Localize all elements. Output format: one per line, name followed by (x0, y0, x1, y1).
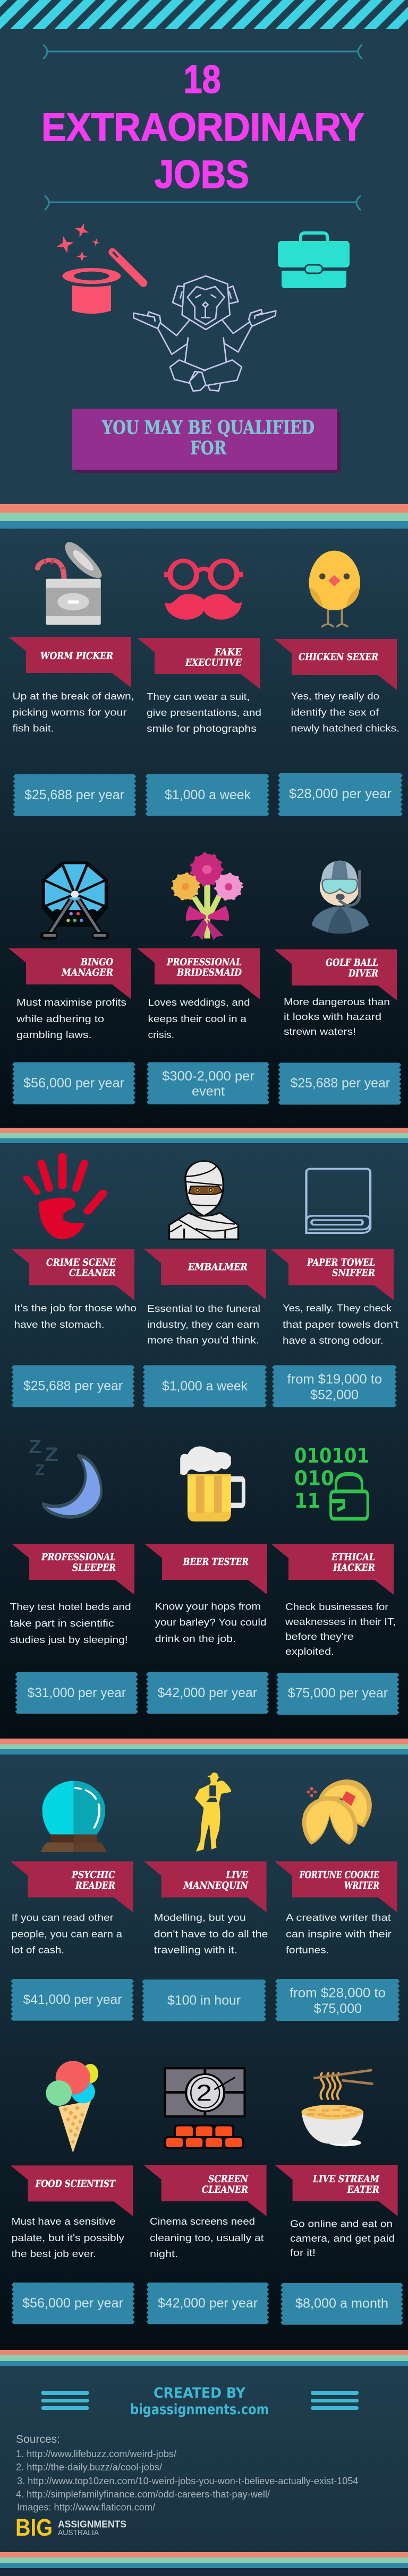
icon: crystal ball (41, 1781, 107, 1852)
description: give presentations, and (147, 707, 261, 718)
icon: ice cream (46, 2061, 98, 2153)
subtitle box: FOR (190, 437, 227, 459)
ribbon: food scientist: FOOD SCIENTIST (35, 2178, 116, 2190)
description: More dangerous than (284, 997, 390, 1007)
ribbon: fake executive: FAKE (214, 646, 242, 658)
salary: $1,000 a week (165, 788, 251, 802)
description: your barley? You could (155, 1617, 267, 1628)
description (285, 1602, 396, 1657)
description (286, 1913, 392, 1956)
colour band 3 (0, 1739, 408, 1754)
icon: moon and zzz: Z (35, 1462, 45, 1479)
card: ethical hacker (271, 1444, 400, 1715)
description: drink on the job. (155, 1633, 236, 1644)
icon: magic hat and wand (54, 221, 143, 314)
description (13, 691, 134, 734)
description: Loves weddings, and (148, 997, 250, 1008)
card: chicken sexer (274, 551, 403, 816)
ribbon: crime scene cleaner: CLEANER (69, 1267, 116, 1279)
salary: $300-2,000 per (162, 1069, 254, 1084)
colour band 2 (0, 1128, 408, 1143)
card: live mannequin (142, 1773, 268, 2021)
ribbon: live stream eater: EATER (347, 2184, 379, 2195)
colour band 1 (0, 504, 408, 529)
card: worm picker (8, 542, 136, 816)
footer: created by (41, 2385, 359, 2418)
sources: 4. http://simplefamilyfinance.com/odd-careers-that-pay-well/ (16, 2489, 270, 2500)
description: Up at the break of dawn, (13, 691, 134, 702)
description: palate, but it's possibly (12, 2233, 124, 2243)
salary: $75,000 per year (288, 1685, 388, 1700)
created by heading: bigassignments.com (130, 2401, 269, 2418)
ribbon: fortune cookie writer: WRITER (344, 1880, 379, 1891)
icon: diver (312, 861, 369, 933)
card: professional bridesmaid (137, 854, 269, 1104)
description (148, 997, 250, 1040)
icon: noodle bowl (301, 2070, 373, 2146)
card: bingo manager (8, 861, 135, 1104)
logo: ASSIGNMENTS (58, 2519, 126, 2530)
salary: from $19,000 to (287, 1372, 382, 1387)
icon: mannequin silhouette (195, 1773, 231, 1852)
salary (276, 1673, 400, 1715)
ribbon: ethical hacker (271, 1544, 394, 1595)
icon: right bars (311, 2391, 359, 2410)
description: travelling with it. (154, 1945, 237, 1956)
ribbon: paper towel sniffer: SNIFFER (332, 1267, 375, 1279)
salary: $25,688 per year (24, 788, 124, 802)
description: Essential to the funeral (147, 1303, 260, 1314)
ribbon: crime scene cleaner (12, 1249, 134, 1300)
icon: cinema screen and seats (164, 2067, 245, 2149)
icon: left bars (41, 2391, 89, 2410)
description: A creative writer that (286, 1913, 391, 1923)
description: crisis. (148, 1030, 174, 1040)
card: screen cleaner (144, 2067, 269, 2324)
description (150, 2216, 264, 2259)
subtitle box: YOU MAY BE QUALIFIED (101, 417, 314, 439)
salary (13, 774, 136, 816)
description (10, 1602, 131, 1645)
description (12, 1913, 123, 1956)
ribbon: professional bridesmaid (137, 948, 260, 999)
description: people, you can earn a (12, 1929, 123, 1939)
card: live stream eater (275, 2070, 403, 2325)
description (147, 691, 261, 734)
title: 18 (184, 57, 221, 101)
icon: chick (309, 551, 360, 627)
title: EXTRAORDINARY (41, 105, 364, 149)
ribbon: professional bridesmaid: BRIDESMAID (176, 967, 242, 979)
description: before they're (285, 1631, 354, 1642)
icon: bouquet (173, 854, 241, 940)
salary: $8,000 a month (295, 2296, 388, 2311)
card: fake executive (137, 561, 269, 816)
description: exploited. (285, 1646, 334, 1657)
card: professional sleeper (10, 1436, 138, 1714)
description: If you can read other (12, 1913, 114, 1923)
description (155, 1601, 267, 1644)
ribbon: embalmer: EMBALMER (188, 1261, 248, 1273)
description: gambling laws. (16, 1030, 91, 1040)
description (147, 1303, 260, 1346)
salary (11, 1979, 134, 2021)
icon: moon and zzz: Z (29, 1436, 41, 1457)
icon: glasses and moustache (164, 561, 243, 620)
description: it looks with hazard (284, 1012, 381, 1022)
salary (146, 1672, 269, 1714)
ribbon: embalmer (143, 1249, 266, 1300)
ribbon: live stream eater: LIVE STREAM (312, 2173, 380, 2185)
icon: binary and padlock: 010101 (294, 1444, 369, 1467)
icon: meditating monkey (134, 276, 276, 391)
card: beer tester (144, 1446, 269, 1714)
sources: Sources: (16, 2433, 60, 2445)
description: Yes, they really do (291, 691, 379, 702)
description: strewn waters! (284, 1026, 356, 1037)
description: They can wear a suit, (147, 691, 250, 702)
ribbon: fortune cookie writer: FORTUNE COOKIE (299, 1869, 379, 1881)
icon: beer mug (180, 1446, 243, 1522)
ribbon: professional sleeper: SLEEPER (72, 1562, 116, 1574)
ribbon: beer tester (144, 1544, 267, 1595)
description (154, 1913, 268, 1956)
salary: $31,000 per year (28, 1685, 126, 1700)
ribbon: bingo manager (8, 948, 131, 999)
sources: 2. http://the-daily.buzz/a/cool-jobs/ (16, 2462, 162, 2473)
description: lot of cash. (12, 1945, 64, 1956)
card: psychic reader (11, 1781, 134, 2021)
ribbon: screen cleaner: CLEANER (202, 2184, 248, 2195)
salary: $42,000 per year (158, 2296, 258, 2311)
description: that paper towels don't (283, 1319, 398, 1330)
salary: $25,688 per year (290, 1076, 390, 1091)
description: smile for photographs (147, 723, 257, 734)
description: studies just by sleeping! (10, 1635, 128, 1645)
ribbon: food scientist (11, 2165, 133, 2216)
ribbon: professional sleeper (12, 1544, 134, 1595)
description (290, 2218, 395, 2258)
salary: $42,000 per year (158, 1685, 257, 1700)
description: industry, they can earn (147, 1319, 259, 1330)
ribbon: paper towel sniffer: PAPER TOWEL (307, 1257, 375, 1268)
salary: $1,000 a week (162, 1379, 248, 1394)
description: Cinema screens need (150, 2216, 255, 2227)
description (16, 997, 126, 1040)
salary: $28,000 per year (289, 786, 392, 801)
ribbon: golf ball diver (274, 949, 397, 1000)
logo: BIG (15, 2514, 53, 2541)
ribbon: professional sleeper: PROFESSIONAL (41, 1551, 116, 1563)
salary: $56,000 per year (22, 2296, 123, 2311)
description: Go online and eat on (290, 2218, 393, 2229)
ribbon: bingo manager: BINGO (80, 956, 113, 968)
ribbon: live mannequin: MANNEQUIN (183, 1880, 249, 1891)
ribbon: worm picker: WORM PICKER (40, 650, 113, 662)
salary (147, 1062, 269, 1104)
icon: cinema screen and seats: 2 (196, 2080, 212, 2106)
salary (12, 1062, 135, 1104)
salary (15, 1672, 138, 1714)
salary (275, 1979, 400, 2021)
ribbon: psychic reader: PSYCHIC (71, 1869, 115, 1881)
salary: $75,000 (314, 2001, 362, 2016)
salary: $56,000 per year (23, 1076, 124, 1091)
salary: $100 in hour (167, 1993, 241, 2008)
description: night. (150, 2249, 178, 2259)
salary (12, 2283, 135, 2324)
sources: 1. http://www.lifebuzz.com/weird-jobs/ (16, 2449, 176, 2459)
top stripes (0, 0, 408, 29)
ribbon: chicken sexer (274, 639, 397, 690)
salary (278, 773, 403, 816)
description: identify the sex of (291, 707, 379, 718)
description: Must have a sensitive (12, 2216, 116, 2227)
ribbon: psychic reader: READER (75, 1880, 115, 1891)
salary (142, 1979, 266, 2021)
icon: binary and padlock: 11 (294, 1489, 320, 1512)
card: food scientist (11, 2061, 135, 2324)
sources (16, 2433, 358, 2513)
ribbon: live mannequin: LIVE (226, 1869, 248, 1881)
card: crime scene cleaner (12, 1156, 137, 1407)
ribbon: screen cleaner: SCREEN (208, 2173, 249, 2185)
description: for it! (290, 2247, 316, 2258)
description: picking worms for your (13, 707, 126, 718)
description: They test hotel beds and (10, 1602, 131, 1612)
icon: moon and zzz: Z (45, 1443, 58, 1465)
salary (280, 2283, 403, 2325)
icon: worm and can (38, 542, 102, 625)
description: take part in scientific (10, 1618, 114, 1629)
ribbon: psychic reader (11, 1861, 133, 1912)
icon: bingo machine (40, 861, 109, 940)
ribbon: chicken sexer: CHICKEN SEXER (299, 651, 378, 663)
salary: from $28,000 to (290, 1986, 386, 2001)
ribbon: fake executive: EXECUTIVE (185, 657, 242, 669)
description: camera, and get paid (290, 2233, 395, 2244)
ribbon: live stream eater (275, 2165, 398, 2216)
description: Yes, really. They check (283, 1303, 392, 1313)
ribbon: paper towel sniffer (271, 1249, 394, 1300)
description: newly hatched chicks. (291, 723, 400, 734)
salary (147, 2283, 269, 2324)
title (41, 57, 364, 196)
subtitle box (72, 409, 341, 473)
salary (278, 1062, 402, 1105)
ribbon: professional bridesmaid: PROFESSIONAL (166, 956, 242, 968)
description (283, 1303, 398, 1346)
description: can inspire with their (286, 1929, 392, 1939)
icon: mummy (169, 1161, 239, 1239)
created by heading (130, 2385, 269, 2418)
salary (146, 774, 269, 816)
icon: briefcase (278, 233, 350, 288)
sources: Images: http://www.flaticon.com/ (17, 2502, 155, 2513)
ribbon: screen cleaner (144, 2165, 267, 2216)
description: keeps their cool in a (148, 1014, 247, 1024)
card: fortune cookie writer (275, 1779, 400, 2021)
description: don't have to do all the (154, 1929, 268, 1939)
colour band 4 (0, 2350, 408, 2366)
description: Check businesses for (285, 1602, 388, 1612)
icon: folded towel (306, 1169, 370, 1233)
description: Know your hops from (155, 1601, 261, 1612)
ribbon: ethical hacker: HACKER (333, 1562, 375, 1574)
salary (12, 1365, 135, 1407)
title: JOBS (155, 152, 249, 196)
description: more than you'd think. (147, 1335, 259, 1346)
logo: AUSTRALIA (58, 2529, 99, 2537)
ribbon: golf ball diver: GOLF BALL (326, 957, 378, 969)
ribbon: ethical hacker: ETHICAL (331, 1551, 375, 1563)
description: the best job ever. (12, 2249, 96, 2259)
title block (41, 45, 364, 210)
sources: 3. http://www.top10zen.com/10-weird-jobs-you-won-t-believe-actually-exist-1054 (17, 2476, 358, 2486)
salary (272, 1365, 397, 1407)
icon: binary and padlock (294, 1444, 369, 1519)
description (14, 1303, 137, 1330)
icon: fortune cookies (302, 1779, 372, 1845)
ribbon: worm picker (8, 637, 131, 688)
description: have a strong odour. (283, 1335, 384, 1346)
ribbon: golf ball diver: DIVER (348, 967, 378, 979)
colour band 5 (0, 2552, 408, 2568)
card: embalmer (143, 1161, 267, 1407)
description: It's the job for those who (14, 1303, 137, 1313)
description: cleaning too, usually at (150, 2233, 264, 2243)
description (284, 997, 390, 1037)
salary: $52,000 (310, 1387, 359, 1402)
salary: $41,000 per year (23, 1992, 122, 2007)
description: fish bait. (13, 723, 54, 734)
ribbon: bingo manager: MANAGER (61, 967, 113, 979)
icon: moon and zzz (29, 1436, 101, 1517)
created by heading: CREATED BY (154, 2385, 245, 2401)
ribbon: beer tester: BEER TESTER (183, 1556, 249, 1568)
salary: $25,688 per year (23, 1379, 123, 1394)
salary: event (192, 1084, 225, 1099)
ribbon: fortune cookie writer (275, 1861, 397, 1912)
salary (143, 1365, 267, 1407)
description (291, 691, 400, 734)
description: have the stomach. (14, 1319, 104, 1330)
ribbon: fake executive (137, 638, 260, 689)
description: weaknesses in their IT, (285, 1617, 396, 1627)
icon: red hand (27, 1156, 103, 1239)
ribbon: crime scene cleaner: CRIME SCENE (46, 1257, 116, 1268)
icon: binary and padlock: 010 (294, 1467, 334, 1490)
card: golf ball diver (274, 861, 402, 1105)
ribbon: live mannequin (144, 1861, 267, 1912)
description: fortunes. (286, 1945, 329, 1956)
description: Modelling, but you (154, 1913, 246, 1923)
description: while adhering to (16, 1014, 104, 1024)
description: Must maximise profits (16, 997, 126, 1008)
description (12, 2216, 124, 2259)
logo (15, 2514, 126, 2541)
card: paper towel sniffer (271, 1169, 398, 1407)
